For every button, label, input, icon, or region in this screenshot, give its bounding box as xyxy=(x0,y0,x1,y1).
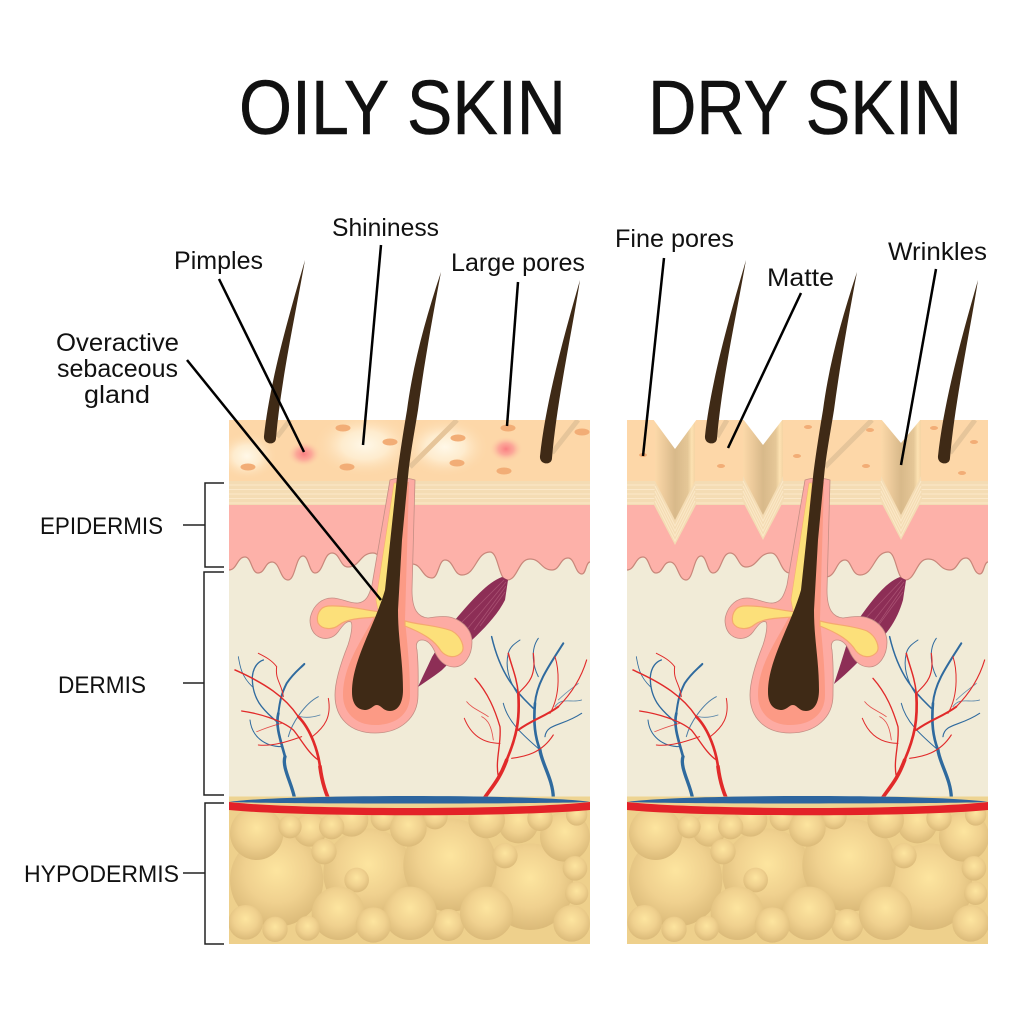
dermis layer xyxy=(627,550,988,797)
hair shadows xyxy=(277,420,578,467)
skin surface layer xyxy=(627,420,988,482)
hair: dry central shaft and bulb xyxy=(768,272,857,711)
layer label: dermis xyxy=(58,572,224,795)
skin surface layer xyxy=(229,420,590,482)
artery and vein bands xyxy=(627,796,988,815)
label: overactive sebaceous gland: gland xyxy=(84,381,150,409)
hair: oily right xyxy=(540,280,580,463)
hair shadows xyxy=(717,420,975,467)
layer label: epidermis: EPIDERMIS xyxy=(40,513,163,540)
layer label: dermis: DERMIS xyxy=(58,672,146,699)
epidermis pink layer xyxy=(627,505,988,580)
title: dry skin: DRY SKIN xyxy=(648,65,962,151)
label: matte: Matte xyxy=(767,264,834,292)
label: pimples: Pimples xyxy=(174,247,263,275)
label: large pores: Large pores xyxy=(451,249,585,277)
panel: dry skin cross-section xyxy=(627,415,989,944)
pimples xyxy=(291,439,519,464)
epidermis wavy edge xyxy=(627,552,988,580)
label: overactive sebaceous gland: sebaceous xyxy=(57,355,178,383)
label: shininess: Shininess xyxy=(332,214,439,242)
epidermis stripes xyxy=(229,481,590,505)
shininess highlights xyxy=(229,421,478,474)
hypodermis fat layer xyxy=(228,800,590,944)
leader lines xyxy=(187,245,936,600)
title: oily skin: OILY SKIN xyxy=(239,65,566,151)
label: fine pores: Fine pores xyxy=(615,225,734,253)
dermis layer xyxy=(229,550,590,797)
epidermis wavy edge xyxy=(229,552,590,580)
label: wrinkles: Wrinkles xyxy=(888,238,987,266)
hair: oily left xyxy=(264,260,305,443)
wrinkle folds xyxy=(654,415,922,545)
layer label: hypodermis: HYPODERMIS xyxy=(24,861,179,888)
blood vessels xyxy=(235,637,587,807)
muscle striations xyxy=(462,580,506,630)
hair: dry left xyxy=(705,260,746,443)
large pores xyxy=(240,424,590,474)
hypodermis fat layer xyxy=(627,800,989,944)
hair: oily central shaft and bulb xyxy=(352,272,441,711)
arrector muscle xyxy=(418,577,508,687)
hair follicle xyxy=(310,478,472,733)
callout labels xyxy=(56,214,987,409)
hair: dry right xyxy=(938,280,978,463)
arrector muscle xyxy=(834,577,906,684)
layer label: hypodermis xyxy=(24,803,224,944)
epidermis stripes xyxy=(627,481,988,505)
epidermis pink layer xyxy=(229,505,590,580)
artery and vein bands xyxy=(229,796,590,815)
fine pores xyxy=(639,425,978,475)
label: overactive sebaceous gland xyxy=(56,329,179,409)
blood vessels xyxy=(633,637,985,807)
muscle striations xyxy=(866,580,904,624)
label: overactive sebaceous gland: Overactive xyxy=(56,329,179,357)
hair follicle xyxy=(725,478,887,733)
wrinkle notches at surface xyxy=(653,419,921,449)
layer label: epidermis xyxy=(40,483,224,567)
panel: oily skin cross-section xyxy=(217,413,590,944)
